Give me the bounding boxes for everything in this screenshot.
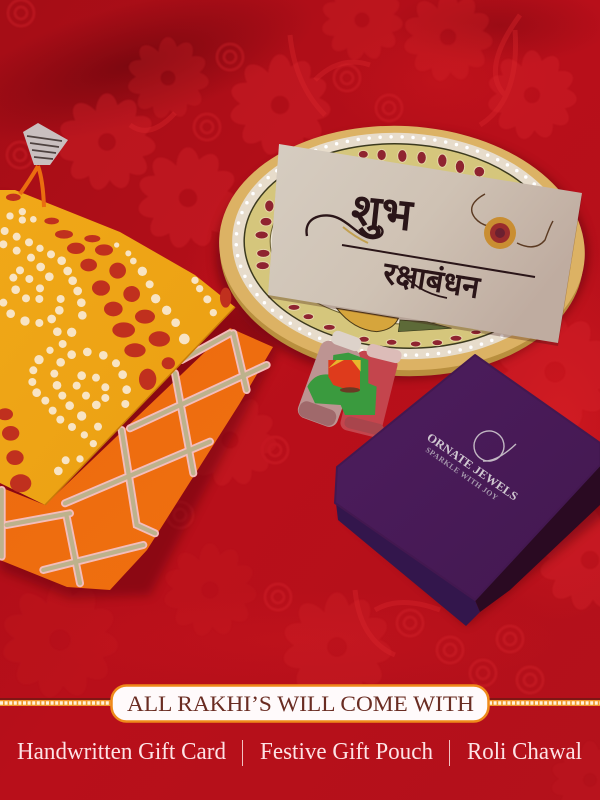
marble thali plate: [212, 117, 591, 385]
header band with rope lines: [0, 686, 600, 722]
orange gota pouch: [0, 328, 273, 590]
white bandhani dots: [0, 208, 217, 475]
green leaves: [307, 353, 377, 415]
card calligraphy: Shubh Raksha Bandhan: रक्षाबंधन: [380, 255, 484, 305]
list of included items: [17, 738, 582, 766]
box logo: Ornate Jewels: ORNATE JEWELS: [424, 430, 521, 504]
right glass jar: [339, 343, 403, 439]
list of included items: Festive Gift Pouch: [260, 738, 433, 765]
purple box shadow: [338, 470, 600, 625]
list of included items: Handwritten Gift Card: [17, 738, 226, 765]
card rakhi illustration: [472, 194, 553, 249]
orange red flower: [328, 360, 361, 393]
yellow and orange pouch shadow: [0, 195, 278, 598]
yellow bandhani pouch: [0, 190, 235, 505]
silver tassel with orange cord: [20, 123, 68, 207]
box logo: Ornate Jewels: SPARKLE WITH JOY: [424, 445, 500, 502]
plate motifs: red drops: [255, 149, 485, 347]
red bandhani squares: [0, 194, 231, 492]
greeting card: [268, 144, 582, 346]
card calligraphy: Shubh Raksha Bandhan: [307, 185, 535, 305]
pill heading: [112, 686, 488, 722]
gota ribbon lattice: [2, 333, 267, 583]
list of included items: Roli Chawal: [467, 738, 582, 765]
plate shadow: [216, 131, 588, 379]
pill heading: ALL RAKHI’S WILL COME WITH: [127, 691, 474, 716]
left glass jar: [295, 329, 363, 429]
card calligraphy: Shubh Raksha Bandhan: शुभ: [349, 185, 417, 244]
rakhi jars with roli chawal: [295, 329, 403, 439]
plate centre motif: [337, 308, 452, 332]
purple Ornate Jewels gift box: [335, 355, 600, 626]
